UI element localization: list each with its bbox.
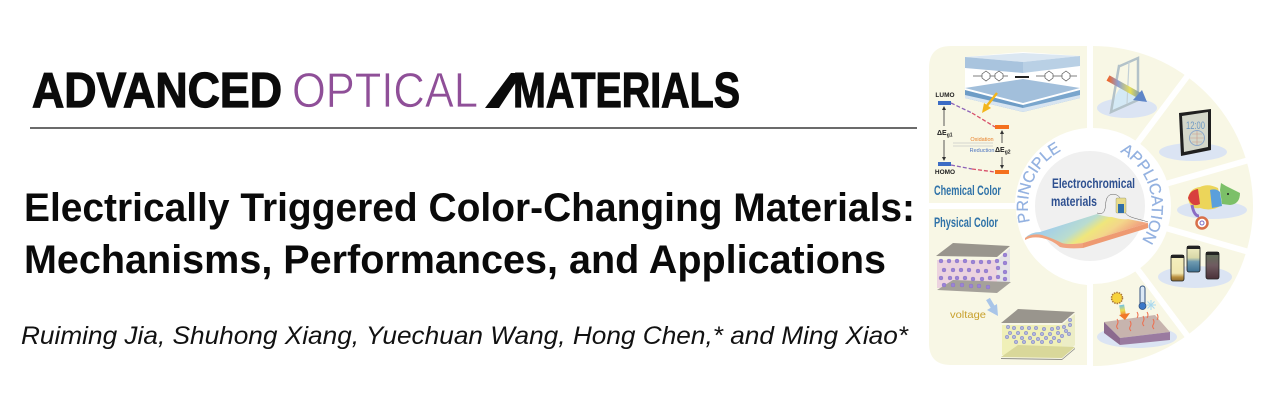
device illustration: [965, 52, 1080, 112]
center label: [1051, 175, 1135, 209]
energy level diagram: ΔE: [937, 130, 947, 137]
heading: chemical color: Chemical Color: [934, 182, 1001, 198]
energy level diagram: Reduction: [970, 148, 994, 154]
energy level diagram: LUMO: [935, 92, 955, 99]
energy level diagram: g2: [1005, 150, 1011, 156]
battery and wire: [1097, 194, 1148, 222]
energy level diagram: [935, 92, 1011, 176]
logo word: ADVANCED: ADVANCED: [32, 64, 282, 118]
wavy electrochromic film: [1025, 214, 1148, 248]
energy level diagram: ΔE: [995, 147, 1005, 154]
arrow: device to energy diagram: [986, 93, 997, 107]
article title: Electrically Triggered Color-Changing Materials:: [24, 186, 915, 230]
logo word: MATERIALS: MATERIALS: [513, 64, 740, 118]
center label: materials: [1051, 193, 1097, 209]
arc label: principle: PRINCIPLE: [1016, 142, 1061, 223]
energy level diagram: Oxidation: [970, 137, 994, 143]
icon: vials: [1158, 246, 1232, 288]
article title: [24, 186, 915, 282]
icon: tablet: [1159, 109, 1227, 161]
journal logo: [32, 64, 740, 118]
cube: transparent state: [1001, 309, 1075, 360]
label: voltage: voltage: [950, 309, 986, 321]
center label: Electrochromical: [1052, 175, 1135, 191]
cube: colored state: [936, 243, 1011, 293]
panel: principle chemical color: [929, 46, 1087, 203]
graphical abstract wheel: [929, 46, 1253, 366]
icon: chameleon: [1177, 183, 1247, 228]
panel: application wedges: [1093, 46, 1253, 366]
heading: physical color: Physical Color: [934, 214, 998, 230]
icon: thermal management: [1097, 286, 1177, 348]
energy level diagram: HOMO: [935, 169, 955, 176]
energy level diagram: g1: [947, 132, 953, 138]
authors: Ruiming Jia, Shuhong Xiang, Yuechuan Wang, Hong Chen,* and Ming Xiao*: [21, 322, 909, 350]
arrow: voltage: [987, 299, 998, 316]
icon: tablet: 12:00: [1186, 120, 1205, 132]
logo word: OPTICAL: OPTICAL: [292, 64, 478, 118]
article title: Mechanisms, Performances, and Applications: [24, 238, 886, 282]
panel: principle physical color: [929, 209, 1087, 365]
center circle: [1035, 151, 1145, 261]
arc label: application: APPLICATION: [1120, 145, 1164, 245]
icon: smart window: [1097, 58, 1157, 118]
